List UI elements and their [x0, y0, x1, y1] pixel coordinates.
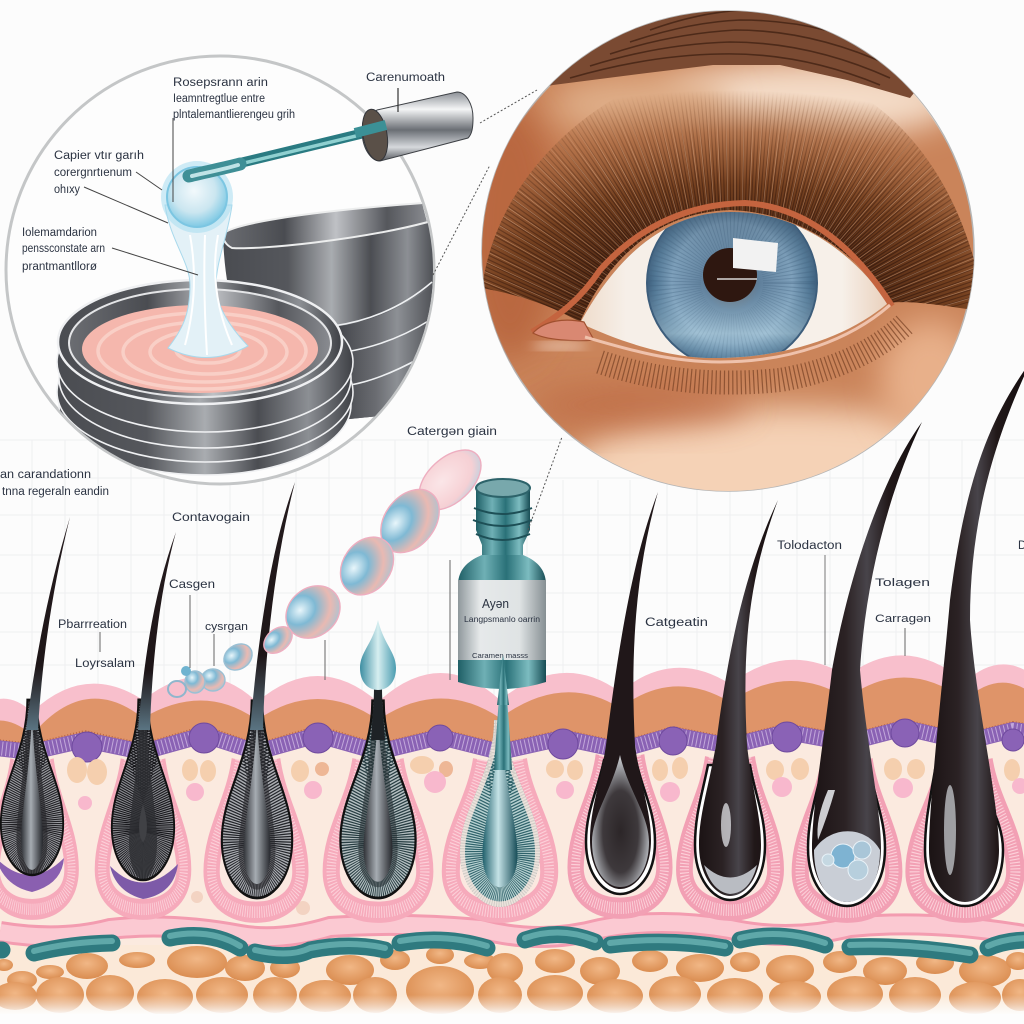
bulb 2	[112, 700, 174, 880]
fat cells	[0, 946, 1024, 1015]
purple crescent 2	[110, 864, 178, 899]
dermal cells	[67, 756, 1020, 785]
label: Casgen: Casgen	[169, 577, 215, 591]
hair neck 4	[371, 688, 385, 740]
silver bulb 6	[592, 755, 649, 887]
hair follicle 6	[586, 492, 658, 894]
label subtitle: Langpsmanlo oarrin	[464, 615, 540, 624]
back jar body	[223, 195, 440, 420]
sheath 2	[102, 760, 184, 909]
cream swirls	[98, 313, 306, 389]
hair follicle 9	[925, 368, 1024, 906]
leader: Pbarrreation	[99, 632, 101, 652]
hair 8	[812, 422, 922, 902]
bulb 1	[1, 700, 63, 875]
hair shaft 2	[138, 532, 176, 730]
sheath 3	[212, 760, 300, 912]
connector: dashed guides	[433, 90, 562, 530]
back jar band highlight	[333, 282, 432, 385]
hair follicle 3	[222, 482, 295, 898]
water droplet	[360, 620, 396, 690]
lower lid line	[585, 305, 890, 362]
rod entering cylinder	[355, 125, 386, 133]
gel stream	[165, 205, 248, 358]
pale lower cheek	[572, 388, 908, 491]
label: Loyrsalam: Loyrsalam	[75, 658, 135, 670]
bottle base	[458, 660, 546, 689]
label: Carragon: Carragən	[875, 613, 931, 625]
brow hairs	[570, 10, 895, 85]
gel strands	[185, 235, 232, 355]
hair 6	[590, 492, 658, 889]
catchlight	[733, 238, 778, 272]
panel: fat layer	[0, 945, 1024, 1024]
callout: sphere note: ohıxy	[54, 184, 80, 196]
gel sphere	[167, 167, 227, 227]
hair follicle 8	[808, 422, 922, 906]
lid fold	[532, 203, 892, 332]
back jar lower band	[338, 286, 432, 420]
follicle sheaths	[0, 756, 1015, 912]
callout: sphere note: corergnrtıenum	[54, 167, 132, 179]
iris	[646, 212, 818, 358]
hair shaft 1	[26, 517, 70, 730]
spatula rod	[189, 128, 385, 176]
applicator cylinder	[362, 92, 473, 161]
bottom fade	[0, 995, 1024, 1015]
bulb outline 7	[695, 765, 765, 900]
label: Tolagen: Tolagen	[875, 577, 930, 589]
leader: bead line	[324, 640, 326, 680]
callout: applicator: Carenumoath	[366, 72, 445, 84]
pink cream	[82, 305, 318, 393]
sheath 7	[684, 758, 776, 910]
eyebrow	[550, 11, 914, 98]
label: Catagen grain: Catergən giain	[407, 426, 497, 438]
sheen 9	[944, 785, 956, 875]
leader: bottle line	[449, 560, 451, 680]
under-eye shadow	[530, 383, 750, 427]
label: Tolodacton: Tolodacton	[777, 540, 842, 552]
pink surface layer	[0, 655, 1024, 735]
sheath 9	[915, 760, 1015, 912]
pink connective band	[0, 923, 1024, 937]
label title: Ayən	[482, 596, 509, 611]
silver base 7	[704, 865, 757, 894]
serum bottle	[458, 479, 546, 689]
callout: top note: Ieamntregtlue entre	[173, 93, 265, 105]
pupil	[703, 248, 757, 302]
neck threads	[473, 508, 532, 540]
iris fibers	[675, 226, 789, 340]
label: Pbarrreation: Pbarrreation	[58, 619, 127, 631]
dermis	[0, 730, 1024, 960]
sheen 8	[817, 790, 835, 840]
fade to page	[0, 1014, 1024, 1024]
callout: stream note: penssconstate arn	[22, 243, 105, 255]
callout: top note: Rosepsrann arin	[173, 77, 268, 89]
right cheek	[880, 320, 980, 440]
teal spike over bottle	[497, 655, 509, 705]
sheath 6	[576, 756, 664, 908]
lid shadow	[580, 205, 888, 323]
tear duct highlight	[532, 343, 588, 349]
bulb outline 8	[808, 770, 885, 906]
teal capsule vessels	[0, 932, 1024, 956]
purple crescent 1	[0, 858, 64, 892]
panel: product jar close-up	[6, 56, 473, 484]
lower lashes	[600, 324, 905, 383]
label: top-left section note: an carandationn	[0, 469, 91, 481]
teal radial bulb	[460, 720, 540, 907]
pink cells	[78, 771, 1024, 810]
callout: stream note: prantmantllorø	[22, 261, 97, 273]
bulb outline 9	[925, 770, 1003, 906]
hair follicle 1	[0, 517, 70, 892]
circle background	[6, 56, 434, 484]
sheen 7	[721, 803, 731, 847]
sheath 8	[800, 760, 894, 912]
sheath 5	[451, 760, 549, 912]
leader: cysrgan	[213, 634, 215, 666]
leader: Tolodacton	[824, 555, 826, 665]
leader: top note	[172, 118, 174, 202]
blue bubbles	[822, 841, 871, 880]
cylinder opening	[359, 107, 391, 163]
dish rim	[58, 280, 342, 404]
gel sphere halo	[161, 161, 233, 233]
back jar rim	[223, 203, 428, 248]
callout: sphere note: Capier vtır garıh	[54, 150, 144, 162]
hair 7	[699, 500, 778, 896]
leader: stream note	[112, 248, 198, 275]
hair follicle 2	[110, 532, 178, 899]
callout: stream note: Iolemamdarion	[22, 227, 97, 239]
bulb outline 6	[586, 760, 655, 894]
leader: Casgen	[189, 595, 191, 668]
hair follicle 5	[460, 705, 540, 907]
catchlight rule	[717, 278, 757, 280]
bulb 4	[340, 701, 416, 898]
sheath 4	[331, 760, 425, 912]
clipped contents	[57, 161, 440, 475]
small dermal dots	[191, 891, 310, 915]
tear duct	[533, 320, 594, 341]
fat background	[0, 945, 1024, 1015]
label: top-left section note: tnna regeraln eandin	[2, 486, 109, 498]
label: cysrgan: cysrgan	[205, 621, 248, 633]
lash mass	[484, 94, 974, 321]
dish interior	[69, 289, 331, 397]
silver base 8	[814, 831, 880, 902]
dish stacked bands	[56, 334, 354, 476]
label: Contavogain: Contavogain	[172, 512, 250, 524]
bead chain	[168, 439, 492, 697]
bottle label	[458, 580, 546, 660]
label footer: Caramen masss	[472, 651, 528, 660]
hair 9	[929, 368, 1024, 902]
teal spike	[494, 655, 512, 770]
panel: eye close-up	[481, 10, 975, 492]
bottle neck	[476, 488, 530, 555]
bottle mouth	[476, 479, 530, 497]
label: Catgeatin: Catgeatin	[645, 617, 708, 629]
left skin shading	[482, 95, 557, 378]
hair follicle 7	[695, 500, 778, 900]
clipped eye artwork	[482, 11, 974, 491]
leader: sphere note	[84, 172, 168, 223]
panel: skin cross-section	[0, 655, 1024, 960]
pale brow bone right	[660, 62, 960, 138]
bulb 3	[222, 701, 292, 898]
hair shaft 3	[250, 482, 295, 730]
eye circle base	[482, 11, 974, 491]
bottle shoulder	[458, 555, 546, 585]
leader: applicator	[397, 88, 399, 112]
callout: top note: plntalemantlierengeu grih	[173, 109, 295, 121]
purple basal layer	[0, 728, 1024, 752]
basal cell nuclei	[72, 719, 1024, 762]
hair follicle 4	[340, 620, 416, 898]
lash strands	[505, 135, 960, 305]
peach brow bone left	[550, 75, 730, 135]
leader: Carragon	[904, 628, 906, 656]
sclera	[580, 212, 888, 358]
sheath 1	[0, 760, 72, 909]
iris group	[581, 212, 870, 358]
iris light shading	[648, 199, 816, 367]
orange skin layer	[0, 677, 1024, 752]
